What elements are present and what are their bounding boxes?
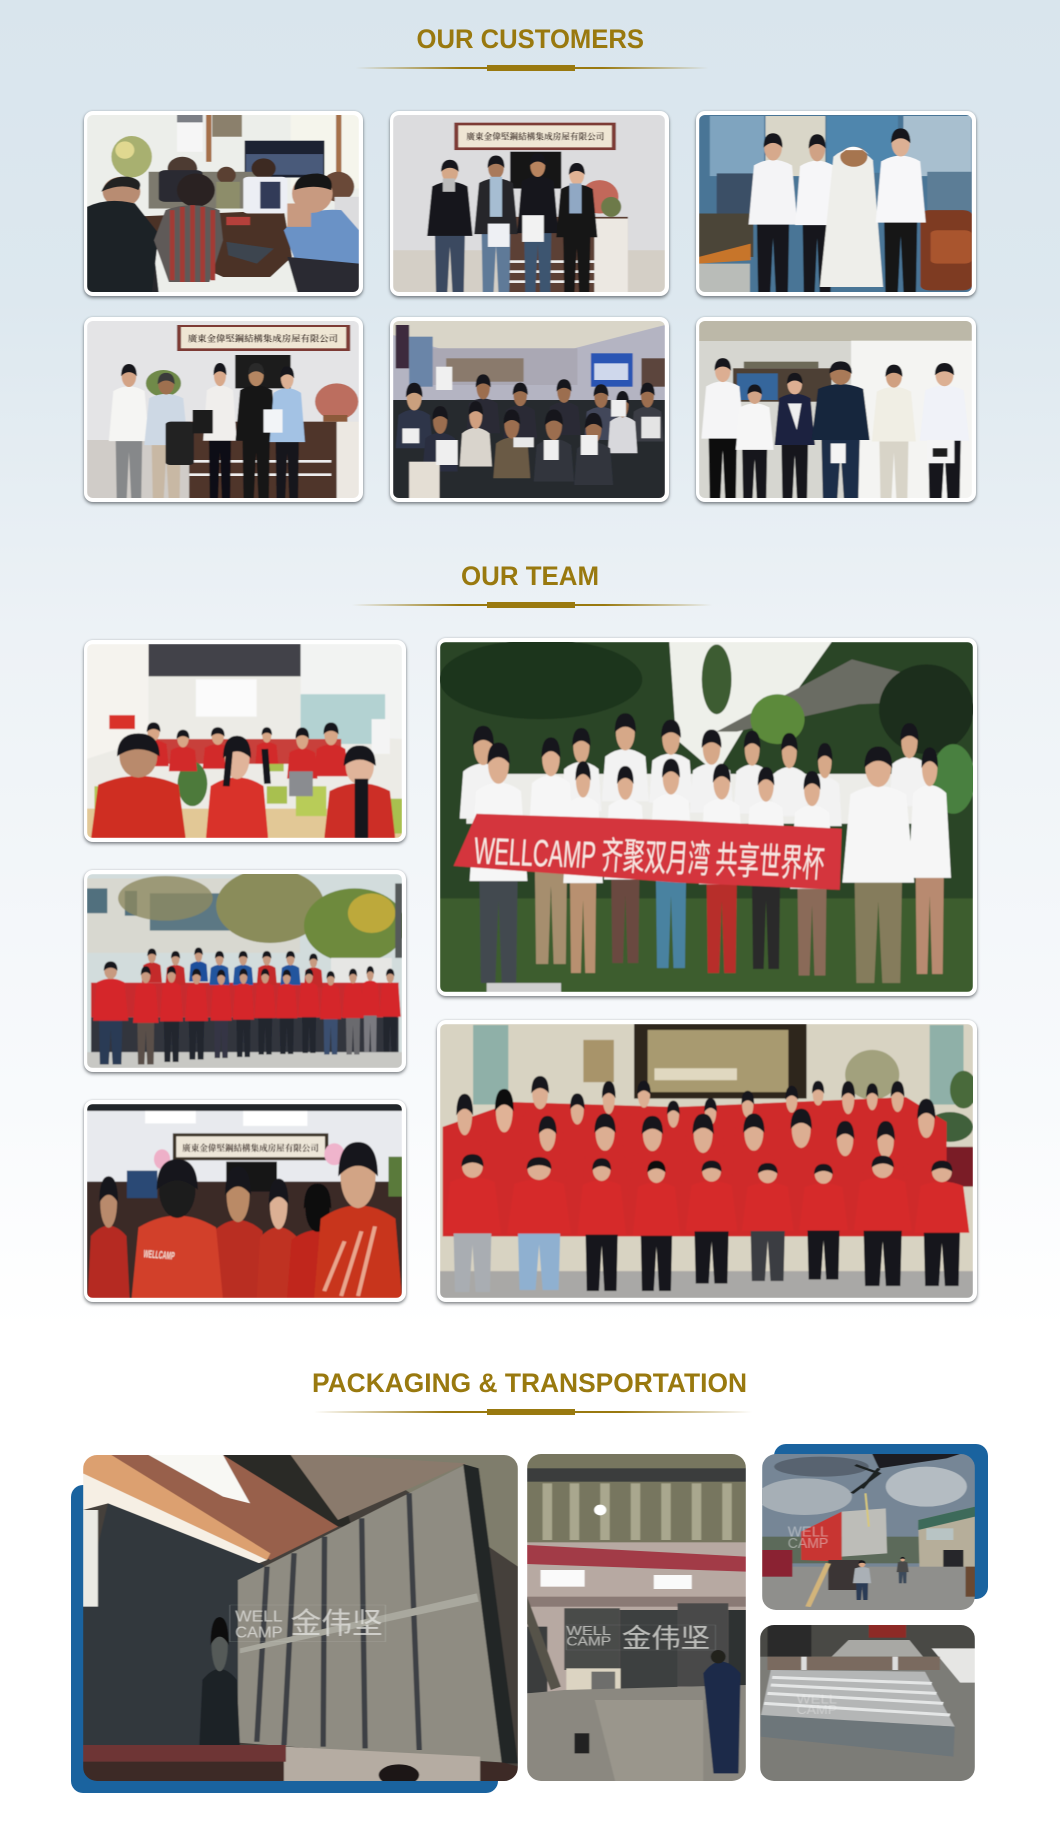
heading: our customers (360, 24, 704, 71)
panel: customer photo 1, meeting around a table (84, 111, 363, 296)
photo: truck unloading with crane: WELL (788, 1525, 828, 1541)
heading: our team: OUR TEAM (461, 561, 599, 591)
panel: customer photo 6, six people with brochures (696, 317, 976, 502)
panel: customer photo 3, men in white shirts by display boards (696, 111, 976, 296)
panel: customer photo 4, five people in reception: 廣東金偉堅鋼結構集成房屋有限公司 (188, 332, 338, 344)
photo: finished steel floor frame: WELL (797, 1691, 838, 1706)
panel: team photo 3, indoor toast in red jackets: 廣東金偉堅鋼結構集成房屋有限公司 (182, 1141, 319, 1154)
panel: team photo 5, red jacket group thumbs up (437, 1020, 977, 1302)
heading: packaging and transportation (312, 1368, 748, 1415)
photo: wall panel being loaded into container: CAMP (235, 1624, 283, 1642)
photo: truck unloading with crane: CAMP (788, 1536, 828, 1552)
photo: finished steel floor frame: CAMP (797, 1702, 837, 1717)
panel: team photo 3, indoor toast in red jackets: WELLCAMP (143, 1248, 175, 1263)
heading: packaging and transportation: PACKAGING & TRANSPORTATION (312, 1368, 747, 1398)
accent: blue block behind truck photo (774, 1444, 988, 1599)
photo: stacked panels in factory: CAMP (566, 1634, 611, 1649)
heading: our team (356, 561, 708, 608)
photo: wall panel being loaded into container (83, 1455, 518, 1781)
photo: truck unloading with crane (762, 1454, 975, 1610)
photo: wall panel being loaded into container: WELL (235, 1608, 283, 1626)
panel: team photo 4, white T-shirt group with red banner: WELLCAMP 齐聚双月湾 共享世界杯 (472, 830, 826, 886)
photo: stacked panels in factory: WELL (566, 1623, 612, 1638)
panel: customer photo 2, four men in reception: 廣東金偉堅鋼結構集成房屋有限公司 (466, 130, 605, 142)
panel: team photo 2, large group outdoors (84, 870, 406, 1072)
photo: finished steel floor frame (760, 1625, 975, 1781)
accent: blue block behind container photo (71, 1485, 498, 1793)
photo: stacked panels in factory: 金伟坚 (622, 1617, 710, 1655)
panel: customer photo 4, five people in reception (84, 317, 363, 502)
panel: customer photo 2, four men in reception (390, 111, 669, 296)
panel: customer photo 5, large group in office (390, 317, 669, 502)
photo: stacked panels in factory (527, 1454, 746, 1781)
panel: team photo 3, indoor toast in red jackets (84, 1100, 406, 1302)
panel: team photo 1, red jackets in office (84, 640, 406, 842)
panel: team photo 4, white T-shirt group with red banner (437, 638, 977, 996)
heading: our customers: OUR CUSTOMERS (416, 24, 644, 54)
photo: wall panel being loaded into container: 金伟坚 (291, 1600, 383, 1642)
